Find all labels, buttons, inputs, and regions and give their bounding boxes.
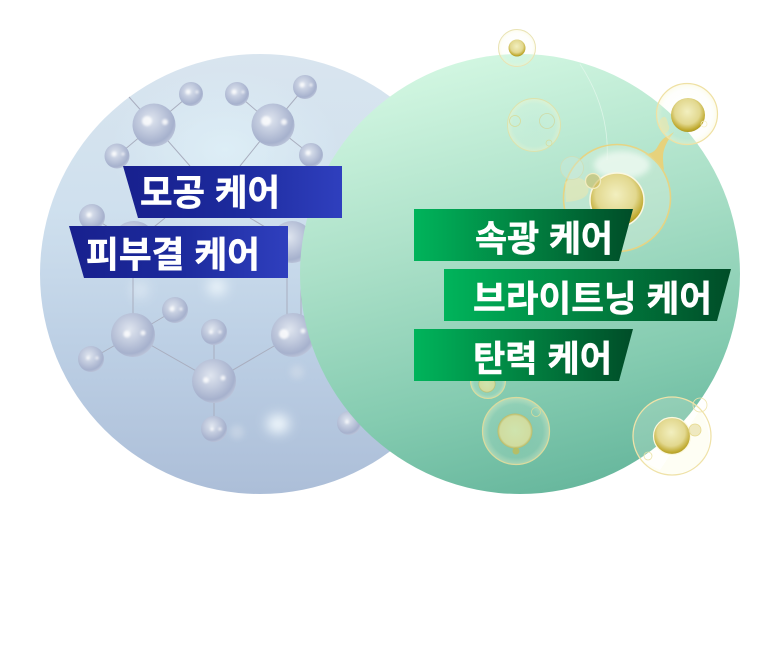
banner: pore care: 모공 케어 <box>140 172 280 213</box>
panel: blue molecule circle <box>40 54 390 494</box>
molecule spheres <box>78 75 361 442</box>
banner: elasticity care: 탄력 케어 <box>473 338 612 379</box>
banner: brightening care <box>444 269 731 321</box>
banner: pore care <box>123 166 342 218</box>
icon: lower right bubble <box>633 397 711 475</box>
banner: inner glow care <box>414 209 633 261</box>
icon: top right bubble with yolk <box>656 84 718 144</box>
banner: skin texture care: 피부결 케어 <box>86 234 260 275</box>
icon: lower bubble <box>482 398 550 464</box>
banner: elasticity care <box>414 329 633 381</box>
banner: inner glow care: 속광 케어 <box>475 218 613 259</box>
panel: green oil bubble circle <box>300 54 740 494</box>
icon: partly hidden lower bubble <box>470 364 506 398</box>
decorative thin highlight arc <box>580 64 607 160</box>
molecule bonds <box>91 87 311 429</box>
banner: brightening care: 브라이트닝 케어 <box>473 278 712 319</box>
icon: clear bubble <box>508 98 560 152</box>
banner: skin texture care <box>69 226 288 278</box>
icon: large oil drop with neck <box>560 132 674 252</box>
icon: small top bubble <box>498 30 536 66</box>
